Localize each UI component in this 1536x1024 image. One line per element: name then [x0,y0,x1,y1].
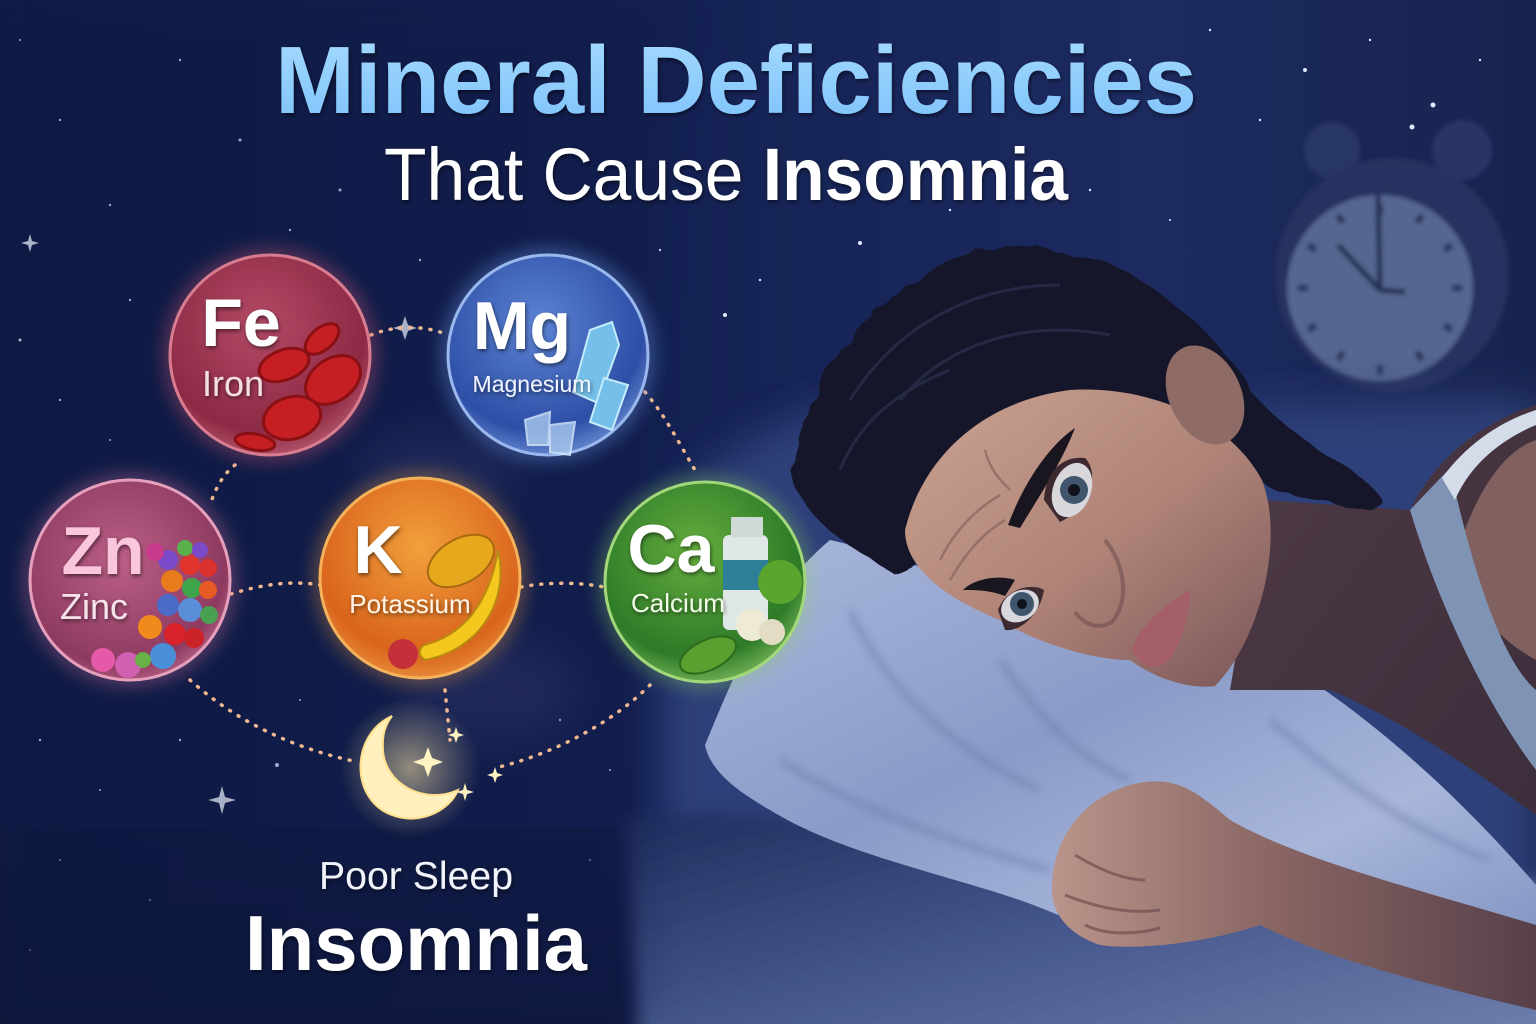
icon: crescent moon with stars [340,698,503,838]
mineral: iron [162,247,378,463]
mineral: zinc: Zinc [60,586,128,627]
brows and eyes [1008,428,1075,528]
caption: poor sleep: Poor Sleep [319,855,513,898]
mineral: potassium: Potassium [349,589,471,619]
hand over pillow [1052,781,1536,1010]
nose and mouth [1075,540,1123,626]
shoulder and chest [1230,405,1536,815]
forehead wrinkles [940,450,1010,580]
pillow [705,540,1536,935]
mineral: potassium: K [353,512,403,588]
caption: insomnia: Insomnia [245,899,588,987]
title: That Cause Insomnia [384,133,1069,216]
mineral: magnesium: Magnesium [473,371,591,397]
tank top [1410,468,1536,770]
dotted connectors [190,328,695,768]
mineral: calcium: Calcium [631,588,725,618]
title [275,27,1197,216]
hair [795,247,1380,575]
title: Mineral Deficiencies [275,27,1197,134]
blurred alarm clock [1275,120,1509,392]
ear [1150,333,1260,457]
mineral: magnesium: Mg [473,288,571,364]
mineral: magnesium [440,247,656,463]
mineral: iron: Iron [202,363,264,404]
mineral: calcium: Ca [628,511,716,587]
mineral: zinc: Zn [61,513,145,589]
mineral: potassium [312,470,528,686]
woman [795,247,1536,815]
bed sheet [625,814,1536,1024]
background smudges: dusty clouds behind minerals [360,430,580,745]
mineral: calcium [597,474,813,690]
mineral: iron: Fe [201,285,281,361]
hair strands [840,285,1110,470]
mineral: zinc [22,472,238,688]
dark wash over left panel [0,0,690,1024]
darker lower band of the left panel [0,828,650,1024]
face [905,390,1271,687]
bed headboard and blanket haze [660,393,1536,1024]
